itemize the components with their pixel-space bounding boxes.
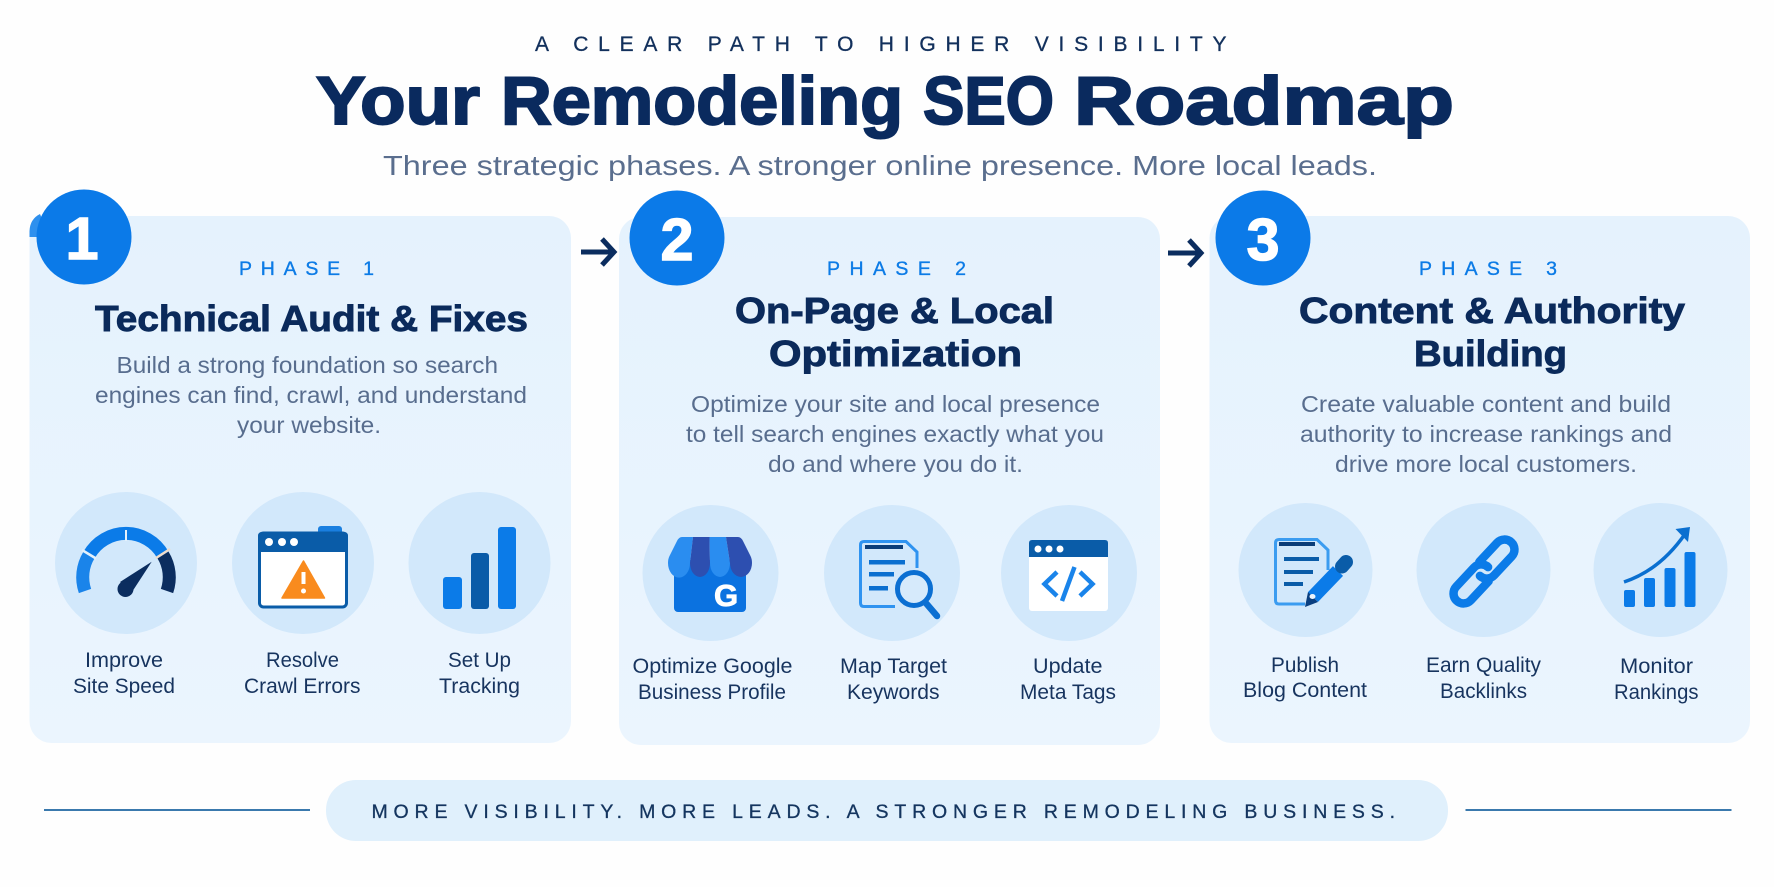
phase 1 description: Build a strong foundation so search	[116, 352, 498, 378]
item: google business profile: Business Profile	[638, 681, 786, 704]
badge 3	[1216, 190, 1310, 286]
icon: bar chart	[443, 527, 516, 609]
phase 3 label: PHASE 3	[1419, 258, 1557, 280]
title: SEO	[923, 63, 1054, 139]
item: improve site speed: Site Speed	[73, 675, 175, 698]
icon: chain link	[1449, 535, 1519, 608]
phase 2 description: to tell search engines exactly what you	[686, 421, 1104, 447]
icon: document search	[860, 542, 937, 616]
item: google business profile: Optimize Google	[632, 655, 792, 678]
phase 1 description: engines can find, crawl, and understand	[95, 382, 527, 408]
item: update meta tags: Update	[1033, 655, 1102, 678]
item: set up tracking: Set Up	[448, 649, 511, 672]
item: monitor rankings: Monitor	[1620, 655, 1693, 678]
header	[316, 33, 1454, 181]
item: publish blog content	[1238, 503, 1372, 702]
item: publish blog content: Blog Content	[1243, 679, 1367, 702]
footer banner	[44, 780, 1732, 841]
icon: code window	[1029, 540, 1108, 611]
item: google business profile	[632, 505, 792, 704]
item: update meta tags	[1001, 505, 1137, 704]
icon: browser warning	[258, 526, 348, 607]
phase 3 description: authority to increase rankings and	[1300, 421, 1672, 447]
panel: phase 2	[619, 190, 1160, 745]
panel: phase 1	[30, 190, 571, 743]
badge 2: 2	[661, 207, 693, 273]
item: resolve crawl errors	[232, 492, 374, 698]
item: set up tracking: Tracking	[439, 675, 520, 698]
item: map target keywords	[824, 505, 960, 704]
phase 2 heading: On-Page & Local	[735, 290, 1054, 331]
item: monitor rankings: Rankings	[1614, 681, 1698, 704]
icon: speedometer	[82, 530, 170, 597]
item: map target keywords: Keywords	[847, 681, 940, 704]
icon: document with pencil	[1276, 540, 1346, 607]
phase 3 heading: Building	[1414, 333, 1567, 374]
eyebrow: A CLEAR PATH TO HIGHER VISIBILITY	[535, 33, 1226, 56]
title	[316, 63, 1454, 139]
subtitle: Three strategic phases. A stronger online presence. More local leads.	[383, 150, 1377, 181]
item: earn quality backlinks: Backlinks	[1440, 680, 1527, 703]
badge 3: 3	[1247, 207, 1279, 273]
badge 1: 1	[66, 206, 98, 272]
icon: storefront: G	[714, 578, 738, 613]
item: earn quality backlinks	[1416, 503, 1550, 703]
phase 3 description: drive more local customers.	[1335, 451, 1637, 477]
phase 1 description: your website.	[237, 412, 381, 438]
phase 2 description: Optimize your site and local presence	[691, 391, 1100, 417]
badge 1	[36, 190, 132, 284]
phase 2 description: do and where you do it.	[768, 451, 1023, 477]
item: improve site speed	[55, 492, 197, 698]
title: Your	[316, 63, 480, 139]
icon: growth chart	[1624, 527, 1696, 607]
phase 2 heading: Optimization	[769, 333, 1022, 374]
arrow: phase 2 to 3	[1168, 240, 1201, 266]
icon: storefront	[668, 537, 752, 613]
item: monitor rankings	[1594, 503, 1728, 704]
phase 3 description	[1300, 391, 1672, 477]
phase 3 heading	[1299, 290, 1685, 374]
arrow: phase 1 to 2	[581, 239, 614, 265]
title: Remodeling	[501, 63, 903, 139]
title: Roadmap	[1074, 63, 1454, 139]
item: improve site speed: Improve	[85, 649, 163, 672]
item: resolve crawl errors: Resolve	[266, 649, 339, 672]
phase 1 description	[95, 352, 527, 438]
phase 1 heading: Technical Audit & Fixes	[95, 298, 528, 339]
footer tagline: MORE VISIBILITY. MORE LEADS. A STRONGER REMODELING BUSINESS.	[372, 801, 1395, 823]
item: earn quality backlinks: Earn Quality	[1426, 654, 1541, 677]
item: resolve crawl errors: Crawl Errors	[244, 675, 360, 698]
phase 2 description	[686, 391, 1104, 477]
item: set up tracking	[408, 492, 550, 698]
phase 2 heading	[735, 290, 1054, 374]
phase 2 label: PHASE 2	[827, 258, 966, 280]
panel: phase 3	[1210, 190, 1750, 743]
item: map target keywords: Map Target	[840, 655, 947, 678]
badge 2	[630, 190, 724, 286]
phase 3 description: Create valuable content and build	[1301, 391, 1671, 417]
phase 1 label: PHASE 1	[239, 258, 374, 280]
phase 3 heading: Content & Authority	[1299, 290, 1685, 331]
item: update meta tags: Meta Tags	[1020, 681, 1116, 704]
item: publish blog content: Publish	[1271, 654, 1339, 677]
